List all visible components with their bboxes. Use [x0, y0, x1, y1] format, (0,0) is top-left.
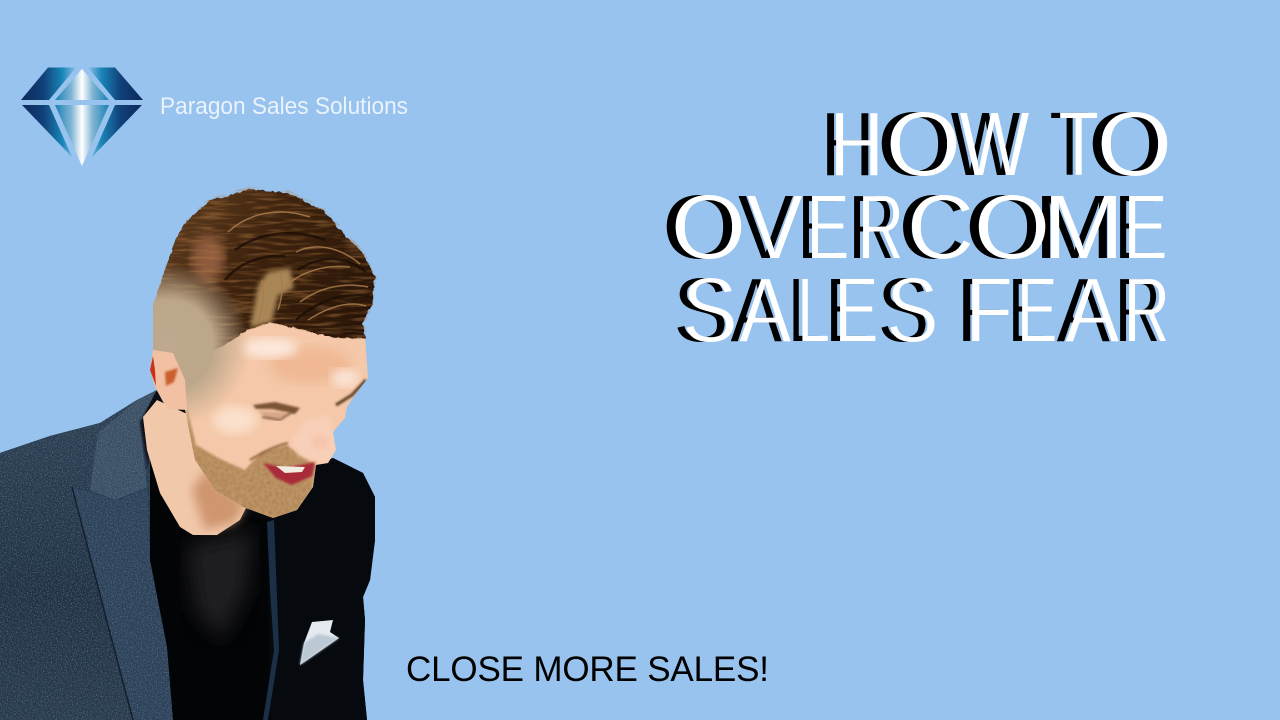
- brow: [253, 402, 300, 414]
- title white layer: H: [830, 92, 883, 196]
- golden tips: [250, 268, 294, 328]
- title shadow layer: A: [730, 258, 782, 362]
- mouth: [263, 462, 315, 485]
- ear: [150, 350, 187, 410]
- title shadow layer: E: [798, 175, 840, 279]
- hair: [153, 186, 377, 350]
- title shadow layer: S: [877, 258, 929, 362]
- title white layer: R: [1124, 258, 1170, 362]
- title shadow layer: R: [849, 175, 895, 279]
- title white layer: O: [886, 92, 961, 196]
- title white layer: E: [807, 175, 849, 279]
- photo: smiling man in a blazer: [0, 185, 380, 720]
- title shadow layer: V: [737, 175, 794, 279]
- title white layer: R: [858, 175, 904, 279]
- title shadow layer: M: [1034, 175, 1115, 279]
- cheek highlight: [213, 406, 257, 434]
- title white layer: A: [739, 258, 792, 362]
- pocket square: [300, 620, 339, 665]
- title white layer: O: [671, 175, 746, 279]
- title shadow layer: [662, 92, 1163, 362]
- tagline: CLOSE MORE SALES!: [406, 650, 769, 689]
- title white layer: M: [1043, 175, 1124, 279]
- face: [184, 322, 368, 518]
- nose: [290, 415, 338, 464]
- hair strands: [228, 212, 368, 322]
- blazer right front: [265, 458, 375, 720]
- hair texture: [150, 185, 380, 345]
- lapel edge: [72, 487, 133, 720]
- title shadow layer: O: [662, 175, 737, 279]
- upper lapel: [90, 390, 157, 500]
- title white layer: O: [1097, 92, 1172, 196]
- title shadow layer: W: [950, 92, 1021, 196]
- title shadow layer: R: [1115, 258, 1161, 362]
- title shadow layer: E: [1115, 175, 1158, 279]
- title white layer: S: [682, 258, 737, 362]
- title white layer: E: [1017, 258, 1057, 362]
- forehead highlight: [242, 338, 298, 358]
- title white layer: E: [835, 258, 878, 362]
- title white layer: V: [746, 175, 803, 279]
- title shadow layer: T: [1050, 92, 1090, 196]
- title shadow layer: O: [965, 175, 1041, 279]
- closed eye: [258, 411, 290, 420]
- t-shirt highlight: [187, 530, 253, 640]
- reddish scalp patch: [192, 234, 224, 282]
- title white layer: S: [886, 258, 938, 362]
- title white layer: F: [966, 258, 1012, 362]
- smile crease: [250, 443, 288, 460]
- neck: [143, 400, 250, 535]
- logo: Paragon Sales Solutions: [21, 68, 408, 166]
- title white layer: [671, 92, 1172, 362]
- title white layer: O: [974, 175, 1050, 279]
- title shadow layer: H: [821, 92, 874, 196]
- right lapel blue edge: [263, 520, 279, 720]
- title white layer: W: [959, 92, 1030, 196]
- right eye line: [336, 380, 366, 405]
- title white layer: A: [1065, 258, 1120, 362]
- title: How to overcome sales fear: [662, 92, 1172, 362]
- t-shirt: [150, 450, 270, 720]
- title shadow layer: F: [957, 258, 1003, 362]
- blazer left side: [0, 400, 173, 720]
- title white layer: T: [1059, 92, 1099, 196]
- title white layer: L: [798, 258, 830, 362]
- title white layer: E: [1124, 175, 1167, 279]
- title shadow layer: S: [673, 258, 728, 362]
- collar shadow behind neck: [140, 392, 165, 470]
- title shadow layer: O: [877, 92, 952, 196]
- warm forehead tone: [270, 347, 350, 383]
- title shadow layer: E: [826, 258, 869, 362]
- title shadow layer: O: [1088, 92, 1163, 196]
- title shadow layer: C: [898, 175, 966, 279]
- title shadow layer: L: [789, 258, 820, 362]
- logo wordmark: Paragon Sales Solutions: [160, 93, 408, 120]
- lower lapel: [72, 487, 173, 720]
- blazer dark base silhouette: [0, 390, 375, 720]
- beard: [186, 405, 316, 522]
- faded hair on temple: [153, 266, 246, 418]
- title shadow layer: E: [1008, 258, 1048, 362]
- title white layer: C: [907, 175, 975, 279]
- title shadow layer: A: [1056, 258, 1110, 362]
- icon: blue diamond: [21, 68, 143, 166]
